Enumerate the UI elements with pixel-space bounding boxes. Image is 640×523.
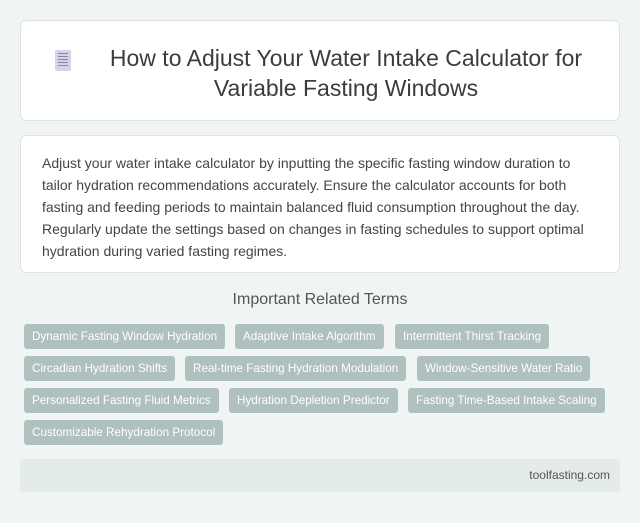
tags: Intermittent Thirst Tracking bbox=[403, 330, 541, 343]
tags: Customizable Rehydration Protocol bbox=[32, 426, 215, 439]
tags: Hydration Depletion Predictor bbox=[237, 394, 390, 407]
icon: receipt bbox=[55, 50, 71, 71]
description text: Adjust your water intake calculator by inputting the specific fasting window duration to tailor hydration recommendations accurately. Ensure the calculator accounts for both fasting and feeding periods to maintain balanced fluid consumption throughout the day. Regularly update the settings based on changes in fasting schedules to support optimal hydration during varied fasting regimes. bbox=[42, 155, 584, 259]
tags: Window-Sensitive Water Ratio bbox=[425, 362, 582, 375]
description card bbox=[20, 135, 620, 273]
title: How to Adjust Your Water Intake Calculator for Variable Fasting Windows bbox=[110, 45, 582, 101]
header card bbox=[20, 20, 620, 121]
tags: Personalized Fasting Fluid Metrics bbox=[32, 394, 211, 407]
tags: Real-time Fasting Hydration Modulation bbox=[193, 362, 398, 375]
tags: Fasting Time-Based Intake Scaling bbox=[416, 394, 597, 407]
tags: Circadian Hydration Shifts bbox=[32, 362, 167, 375]
footer bbox=[20, 459, 620, 492]
tags: Dynamic Fasting Window Hydration bbox=[32, 330, 217, 343]
footer: toolfasting.com bbox=[529, 468, 610, 482]
tags: Adaptive Intake Algorithm bbox=[243, 330, 376, 343]
related terms heading: Important Related Terms bbox=[233, 291, 407, 308]
